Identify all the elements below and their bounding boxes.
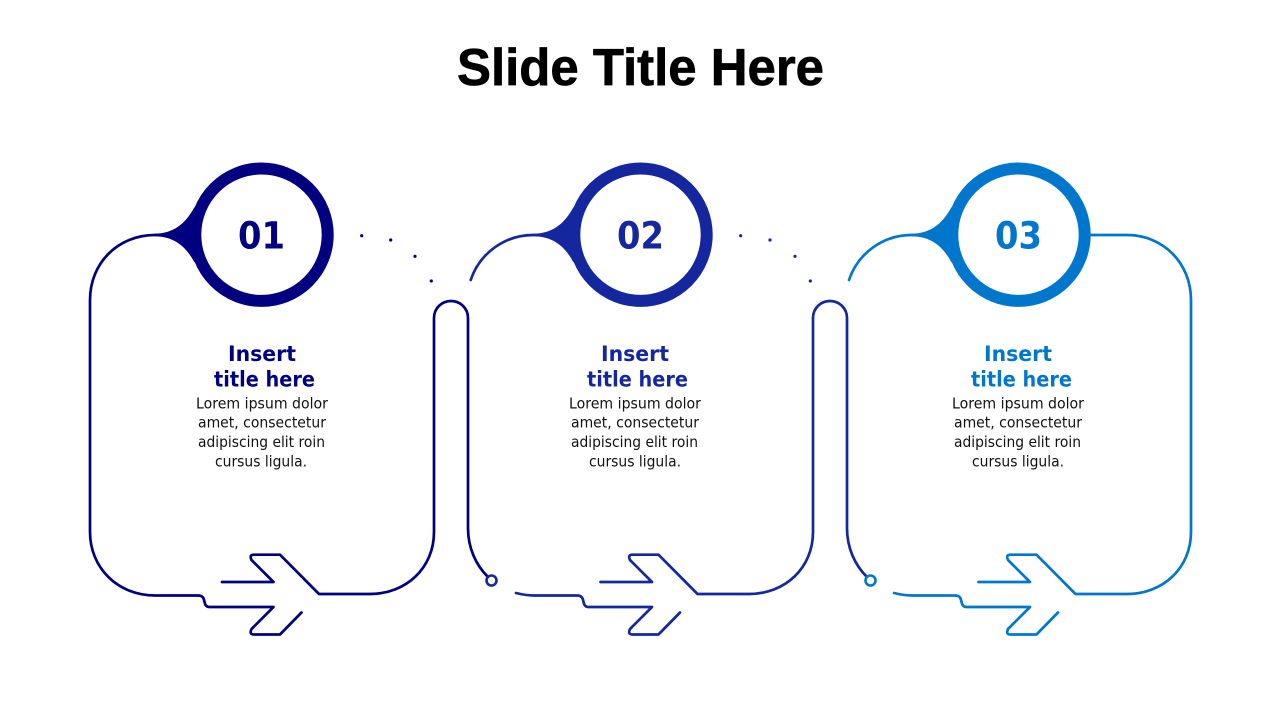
- text block: step 01: amet, consectetur: [198, 415, 327, 432]
- number ring: step 03: [912, 168, 1085, 301]
- text block: step 01: Lorem ipsum dolor: [196, 395, 329, 412]
- number ring: step 02: [534, 168, 707, 301]
- heading: step 01: title here: [214, 368, 315, 392]
- dotted connector: step 01: [360, 234, 433, 283]
- panel: step 02: [471, 168, 876, 634]
- number ring: step 01: [155, 168, 328, 301]
- number: 02: 02: [617, 214, 664, 258]
- panel: step 01: [90, 168, 496, 634]
- number: 01: 01: [238, 214, 285, 258]
- text block: step 03: adipiscing elit roin: [954, 434, 1081, 451]
- title: Slide Title Here: [457, 39, 824, 97]
- text block: step 01: cursus ligula.: [215, 454, 307, 470]
- outline path with arrow: step 01: [90, 235, 488, 634]
- text block: step 02: Lorem ipsum dolor: [569, 395, 702, 412]
- text block: step 01: adipiscing elit roin: [198, 434, 325, 451]
- text block: step 03: amet, consectetur: [954, 415, 1083, 432]
- text block: step 02: amet, consectetur: [571, 415, 700, 432]
- heading: step 01: Insert: [228, 342, 296, 366]
- text block: step 02: adipiscing elit roin: [571, 434, 698, 451]
- text block: step 01: [196, 395, 329, 470]
- heading: step 03: [971, 342, 1072, 392]
- heading: step 03: title here: [971, 368, 1072, 392]
- text block: step 03: cursus ligula.: [972, 454, 1064, 470]
- dotted connector: step 02: [739, 234, 812, 283]
- end node: step 01: [486, 576, 496, 586]
- end node: step 02: [866, 576, 876, 586]
- outline path with arrow: step 02: [471, 235, 866, 635]
- number: 03: 03: [995, 214, 1042, 258]
- heading: step 02: Insert: [601, 342, 669, 366]
- heading: step 03: Insert: [984, 342, 1052, 366]
- text block: step 02: [569, 395, 702, 470]
- heading: step 02: [587, 342, 688, 392]
- text block: step 03: Lorem ipsum dolor: [952, 395, 1085, 412]
- panel: step 03: [849, 168, 1191, 634]
- heading: step 01: [214, 342, 315, 392]
- heading: step 02: title here: [587, 368, 688, 392]
- outline path with arrow: step 03: [849, 235, 1191, 634]
- text block: step 03: [952, 395, 1085, 470]
- text block: step 02: cursus ligula.: [589, 454, 681, 470]
